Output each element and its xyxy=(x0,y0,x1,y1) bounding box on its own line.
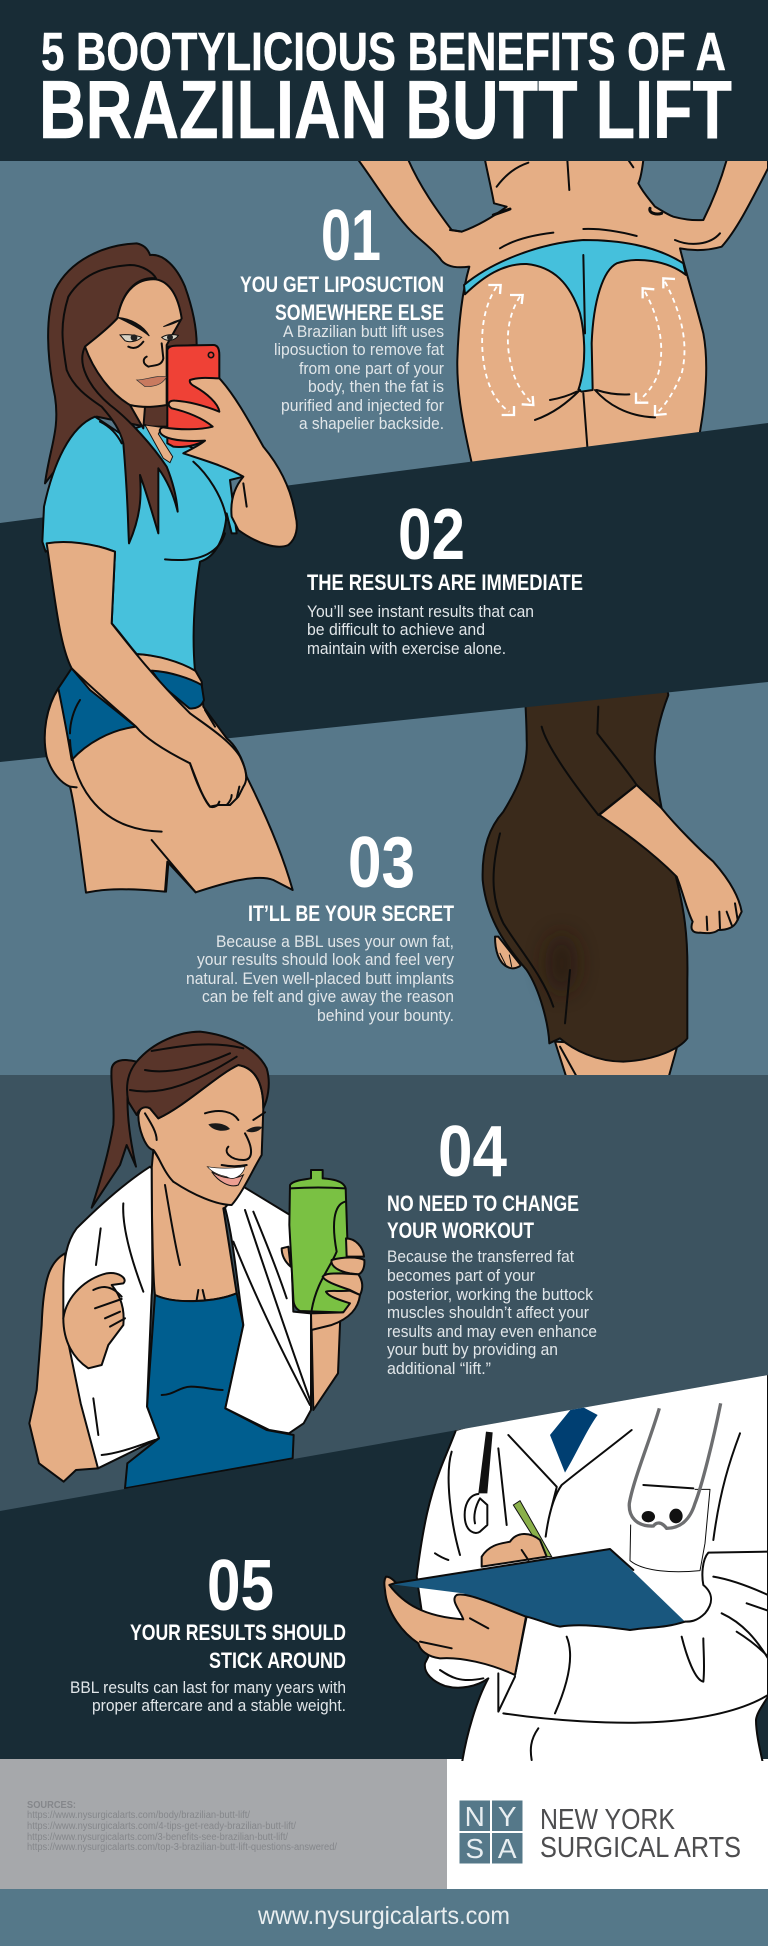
text block: benefit 01: a shapelier backside. xyxy=(299,415,444,433)
text block: benefit 03: behind your bounty. xyxy=(317,1007,454,1025)
text block: benefit 05: STICK AROUND xyxy=(209,1648,346,1673)
text block: benefit 02: 02 xyxy=(398,495,465,575)
illustration: woman taking a mirror selfie xyxy=(42,243,297,893)
fingers holding the bottle xyxy=(311,1238,364,1330)
text block: benefit 04 xyxy=(387,1112,597,1378)
text block: benefit 05: BBL results can last for many years with xyxy=(70,1679,346,1697)
text block: benefit 01: purified and injected for xyxy=(281,397,444,415)
sources list: https://www.nysurgicalarts.com/3-benefits-see-brazilian-butt-lift/ xyxy=(27,1832,288,1843)
text block: benefit 03: natural. Even well-placed butt implants xyxy=(186,970,454,988)
logo: company name xyxy=(540,1804,741,1864)
text block: benefit 03 xyxy=(186,823,455,1025)
panel: footer bar xyxy=(0,1889,768,1946)
panel: sources background xyxy=(0,1759,447,1889)
illustration: woman in black dress seen from behind xyxy=(483,687,742,1078)
text block: benefit 02 xyxy=(307,495,583,658)
text block: benefit 04: NO NEED TO CHANGE xyxy=(387,1191,579,1216)
phone xyxy=(167,345,219,447)
panel: section 2 dark band xyxy=(0,423,768,762)
text block: benefit 01: from one part of your xyxy=(299,360,444,378)
text block: benefit 04: additional “lift.” xyxy=(387,1360,491,1378)
sources list: SOURCES: xyxy=(27,1800,76,1811)
illustration: smiling woman with towel and water bottle xyxy=(29,1032,364,1488)
text block: benefit 03: Because a BBL uses your own fat, xyxy=(216,933,454,951)
sources list: https://www.nysurgicalarts.com/4-tips-get-ready-brazilian-butt-lift/ xyxy=(27,1821,296,1832)
text block: benefit 03: your results should look and feel very xyxy=(197,951,455,969)
panel: logo background xyxy=(447,1759,768,1889)
text block: benefit 03: IT’LL BE YOUR SECRET xyxy=(248,901,454,926)
logo: NYSA grid mark: S xyxy=(465,1833,484,1864)
hair back xyxy=(45,243,197,483)
panel: section 5 dark band xyxy=(0,1375,768,1760)
text block: benefit 05: 05 xyxy=(207,1546,274,1626)
text block: benefit 05: proper aftercare and a stable weight. xyxy=(92,1697,346,1715)
text block: benefit 04: posterior, working the buttock xyxy=(387,1286,594,1304)
logo: company name: NEW YORK xyxy=(540,1804,676,1836)
sources list xyxy=(27,1800,337,1853)
illustration: back view in blue bikini xyxy=(358,160,768,470)
logo: company name: SURGICAL ARTS xyxy=(540,1832,741,1864)
logo: NYSA grid mark xyxy=(460,1800,522,1864)
text block: benefit 04: results and may even enhance xyxy=(387,1323,597,1341)
text block: benefit 01: SOMEWHERE ELSE xyxy=(275,300,444,325)
panel: section 1 and 3 background xyxy=(0,161,768,1075)
panel: header bar xyxy=(0,0,768,161)
text block: benefit 03: can be felt and give away the reason xyxy=(202,988,454,1006)
footer website address: www.nysurgicalarts.com xyxy=(257,1902,510,1930)
panel: section 4 background xyxy=(0,1075,768,1511)
text block: benefit 02: THE RESULTS ARE IMMEDIATE xyxy=(307,570,583,595)
logo: NYSA grid mark: A xyxy=(498,1833,517,1864)
text block: benefit 02: maintain with exercise alone. xyxy=(307,640,506,658)
text block: benefit 03: 03 xyxy=(348,823,415,903)
text block: benefit 01: liposuction to remove fat xyxy=(274,341,444,359)
text block: benefit 04: your butt by providing an xyxy=(387,1341,558,1359)
text block: benefit 04: YOUR WORKOUT xyxy=(387,1218,534,1243)
face xyxy=(85,279,182,407)
text block: benefit 01: 01 xyxy=(321,196,381,276)
title xyxy=(39,22,732,156)
sources list: https://www.nysurgicalarts.com/body/brazilian-butt-lift/ xyxy=(27,1810,250,1821)
sources list: https://www.nysurgicalarts.com/top-3-brazilian-butt-lift-questions-answered/ xyxy=(27,1842,337,1853)
logo: NYSA grid mark: Y xyxy=(498,1801,517,1832)
text block: benefit 05 xyxy=(70,1546,346,1715)
text block: benefit 02: You’ll see instant results that can xyxy=(307,603,534,621)
text block: benefit 01 xyxy=(240,196,444,433)
text block: benefit 04: muscles shouldn’t affect your xyxy=(387,1304,589,1322)
text block: benefit 02: be difficult to achieve and xyxy=(307,621,485,639)
logo: NYSA grid mark: N xyxy=(465,1801,485,1832)
text block: benefit 01: A Brazilian butt lift uses xyxy=(283,323,444,341)
text block: benefit 04: 04 xyxy=(438,1112,507,1192)
text block: benefit 01: body, then the fat is xyxy=(308,378,444,396)
front hair xyxy=(62,265,178,543)
illustration: doctor in white coat with clipboard xyxy=(384,1360,768,1765)
text block: benefit 05: YOUR RESULTS SHOULD xyxy=(130,1620,346,1645)
hand and forearm xyxy=(160,378,297,547)
text block: benefit 04: becomes part of your xyxy=(387,1267,535,1285)
text block: benefit 01: YOU GET LIPOSUCTION xyxy=(240,272,444,297)
text block: benefit 04: Because the transferred fat xyxy=(387,1248,574,1266)
neck xyxy=(130,405,145,428)
legs and lower body xyxy=(42,417,293,893)
